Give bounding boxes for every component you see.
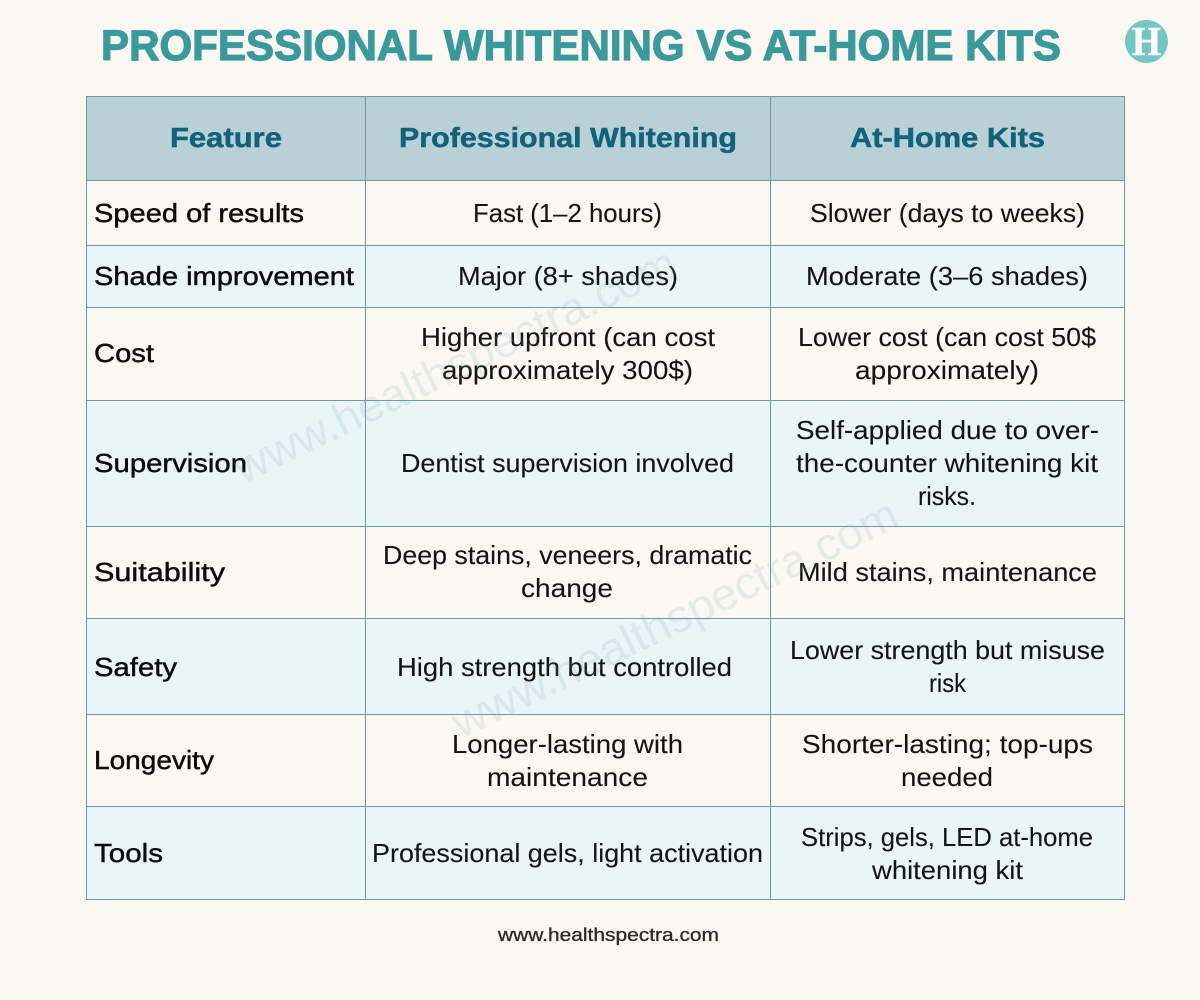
row: longevity: Shorter-lasting; top-ups [802, 729, 1093, 759]
row: speed of results: Fast (1–2 hours) [473, 198, 662, 228]
row: tools: Strips, gels, LED at-home [801, 822, 1093, 852]
row: longevity [94, 729, 1093, 792]
row: safety: High strength but controlled [397, 652, 732, 682]
row: safety: Safety [94, 652, 177, 682]
row backgrounds [86, 96, 1124, 899]
row: shade improvement: Major (8+ shades) [458, 261, 678, 291]
row: supervision: risks. [918, 481, 976, 511]
row: cost: Cost [94, 338, 155, 368]
row: shade improvement [94, 261, 1088, 291]
table header [170, 122, 1045, 153]
row: safety [94, 635, 1105, 698]
row: longevity: maintenance [487, 762, 648, 792]
row: tools: Tools [94, 838, 163, 868]
row: tools: Professional gels, light activation [372, 838, 763, 868]
row: longevity: Longer-lasting with [452, 729, 683, 759]
row: safety: risk [929, 668, 967, 698]
row: cost: approximately) [855, 355, 1039, 385]
row: shade improvement: Moderate (3–6 shades) [806, 261, 1088, 291]
row: shade improvement: Shade improvement [94, 261, 355, 291]
row: suitability: change [521, 573, 613, 603]
row: supervision: Self-applied due to over- [796, 415, 1099, 445]
row: supervision: Dentist supervision involved [401, 448, 734, 478]
row: suitability [94, 540, 1097, 603]
row: cost: Lower cost (can cost 50$ [798, 322, 1097, 352]
title: PROFESSIONAL WHITENING VS AT-HOME KITS [101, 22, 1061, 70]
row: supervision: Supervision [94, 448, 247, 478]
row: longevity: Longevity [94, 745, 214, 775]
row: tools [94, 822, 1093, 885]
row: suitability: Mild stains, maintenance [798, 557, 1097, 587]
comparison table [86, 96, 1124, 900]
row: speed of results: Slower (days to weeks) [810, 198, 1085, 228]
row: supervision [94, 415, 1099, 511]
row: tools: whitening kit [871, 855, 1024, 885]
row: longevity: needed [901, 762, 993, 792]
row: suitability: Deep stains, veneers, dramatic [383, 540, 752, 570]
row: speed of results: Speed of results [94, 198, 304, 228]
row: cost: approximately 300$) [442, 355, 693, 385]
row: safety: Lower strength but misuse [790, 635, 1105, 665]
row: suitability: Suitability [94, 557, 225, 587]
watermark: upper left: www.healthspectra.com [224, 237, 684, 493]
row: supervision: the-counter whitening kit [796, 448, 1099, 478]
row: cost: Higher upfront (can cost [421, 322, 716, 352]
table header: At-Home Kits [850, 122, 1045, 153]
row: cost [94, 322, 1097, 385]
row: speed of results [94, 198, 1085, 228]
watermark: lower right: www.healthspectra.com [442, 488, 906, 748]
footer url: www.healthspectra.com [497, 925, 719, 945]
table header: Professional Whitening [399, 122, 737, 153]
table header: Feature [170, 122, 282, 153]
icon: H logo: H [1132, 18, 1161, 64]
